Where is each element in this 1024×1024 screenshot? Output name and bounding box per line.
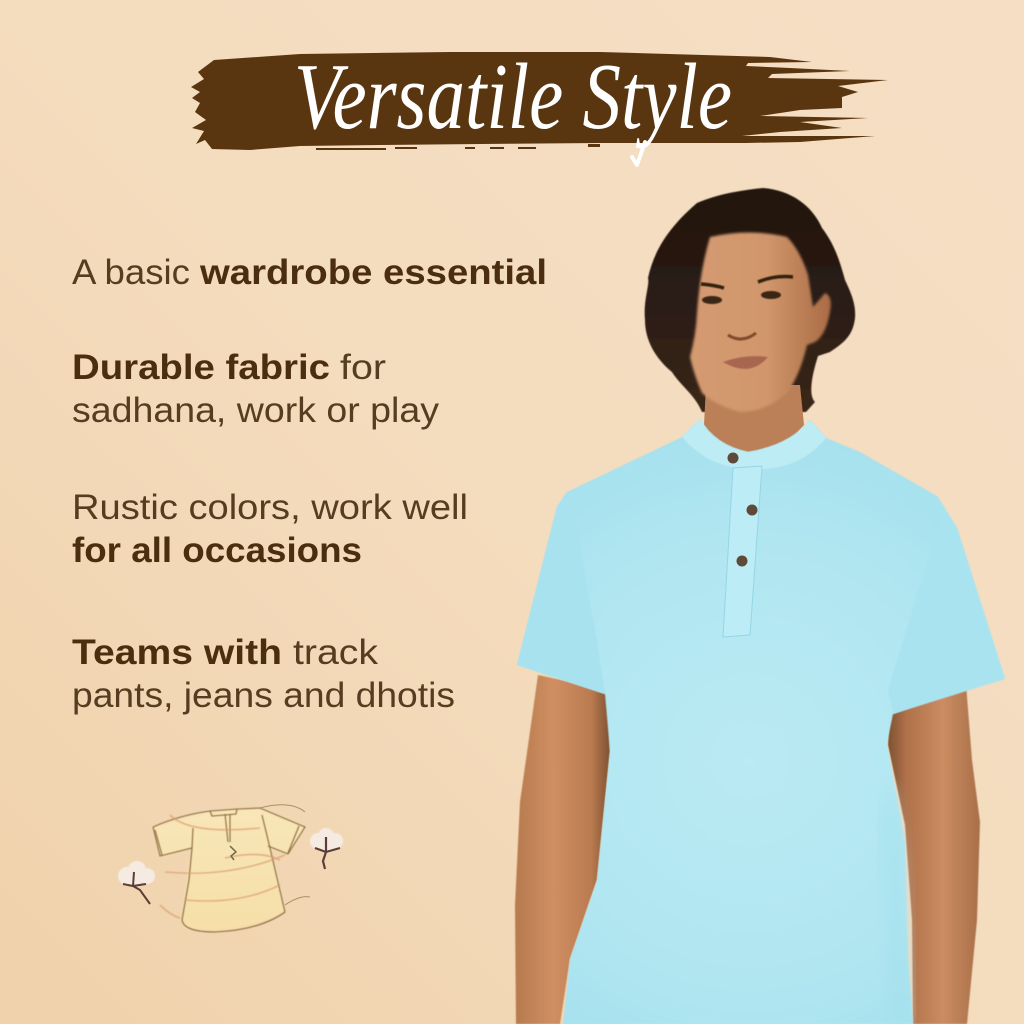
feature: teams with: Teams with <box>72 633 282 672</box>
feature list <box>72 253 547 715</box>
title text: Versatile Style <box>294 45 732 149</box>
icon: kurta with cotton <box>118 805 343 932</box>
placket <box>723 466 762 637</box>
title banner <box>191 45 888 165</box>
facial features <box>701 277 793 369</box>
hair <box>645 188 855 412</box>
feature: wardrobe essential <box>72 253 547 292</box>
sleeve left shade <box>517 492 605 694</box>
neck <box>704 385 804 456</box>
shirt <box>517 419 1005 1024</box>
feature: wardrobe essential: A basic <box>72 253 190 292</box>
left arm <box>515 675 610 1024</box>
icon: cotton boll right <box>310 828 343 869</box>
feature: durable fabric: for <box>340 348 386 387</box>
right arm <box>888 684 980 1024</box>
feature: durable fabric: sadhana, work or play <box>72 391 440 430</box>
sleeve right shade <box>888 496 1005 714</box>
feature: rustic colors <box>72 488 468 570</box>
model photo <box>515 188 1005 1024</box>
face <box>690 232 831 412</box>
feature: durable fabric: Durable fabric <box>72 348 330 387</box>
feature: teams with: track <box>293 633 379 672</box>
feature: rustic colors: Rustic colors, work well <box>72 488 468 527</box>
brush stroke <box>191 52 888 150</box>
icon: cotton boll left <box>118 861 155 904</box>
feature: rustic colors: for all occasions <box>72 531 362 570</box>
feature: teams with: pants, jeans and dhotis <box>72 676 455 715</box>
kurta illustration <box>153 805 310 932</box>
feature: durable fabric <box>72 348 440 430</box>
feature: wardrobe essential: wardrobe essential <box>199 253 547 292</box>
feature: teams with <box>72 633 455 715</box>
side shade <box>880 780 913 1024</box>
collar <box>682 419 826 469</box>
buttons <box>728 452 758 566</box>
